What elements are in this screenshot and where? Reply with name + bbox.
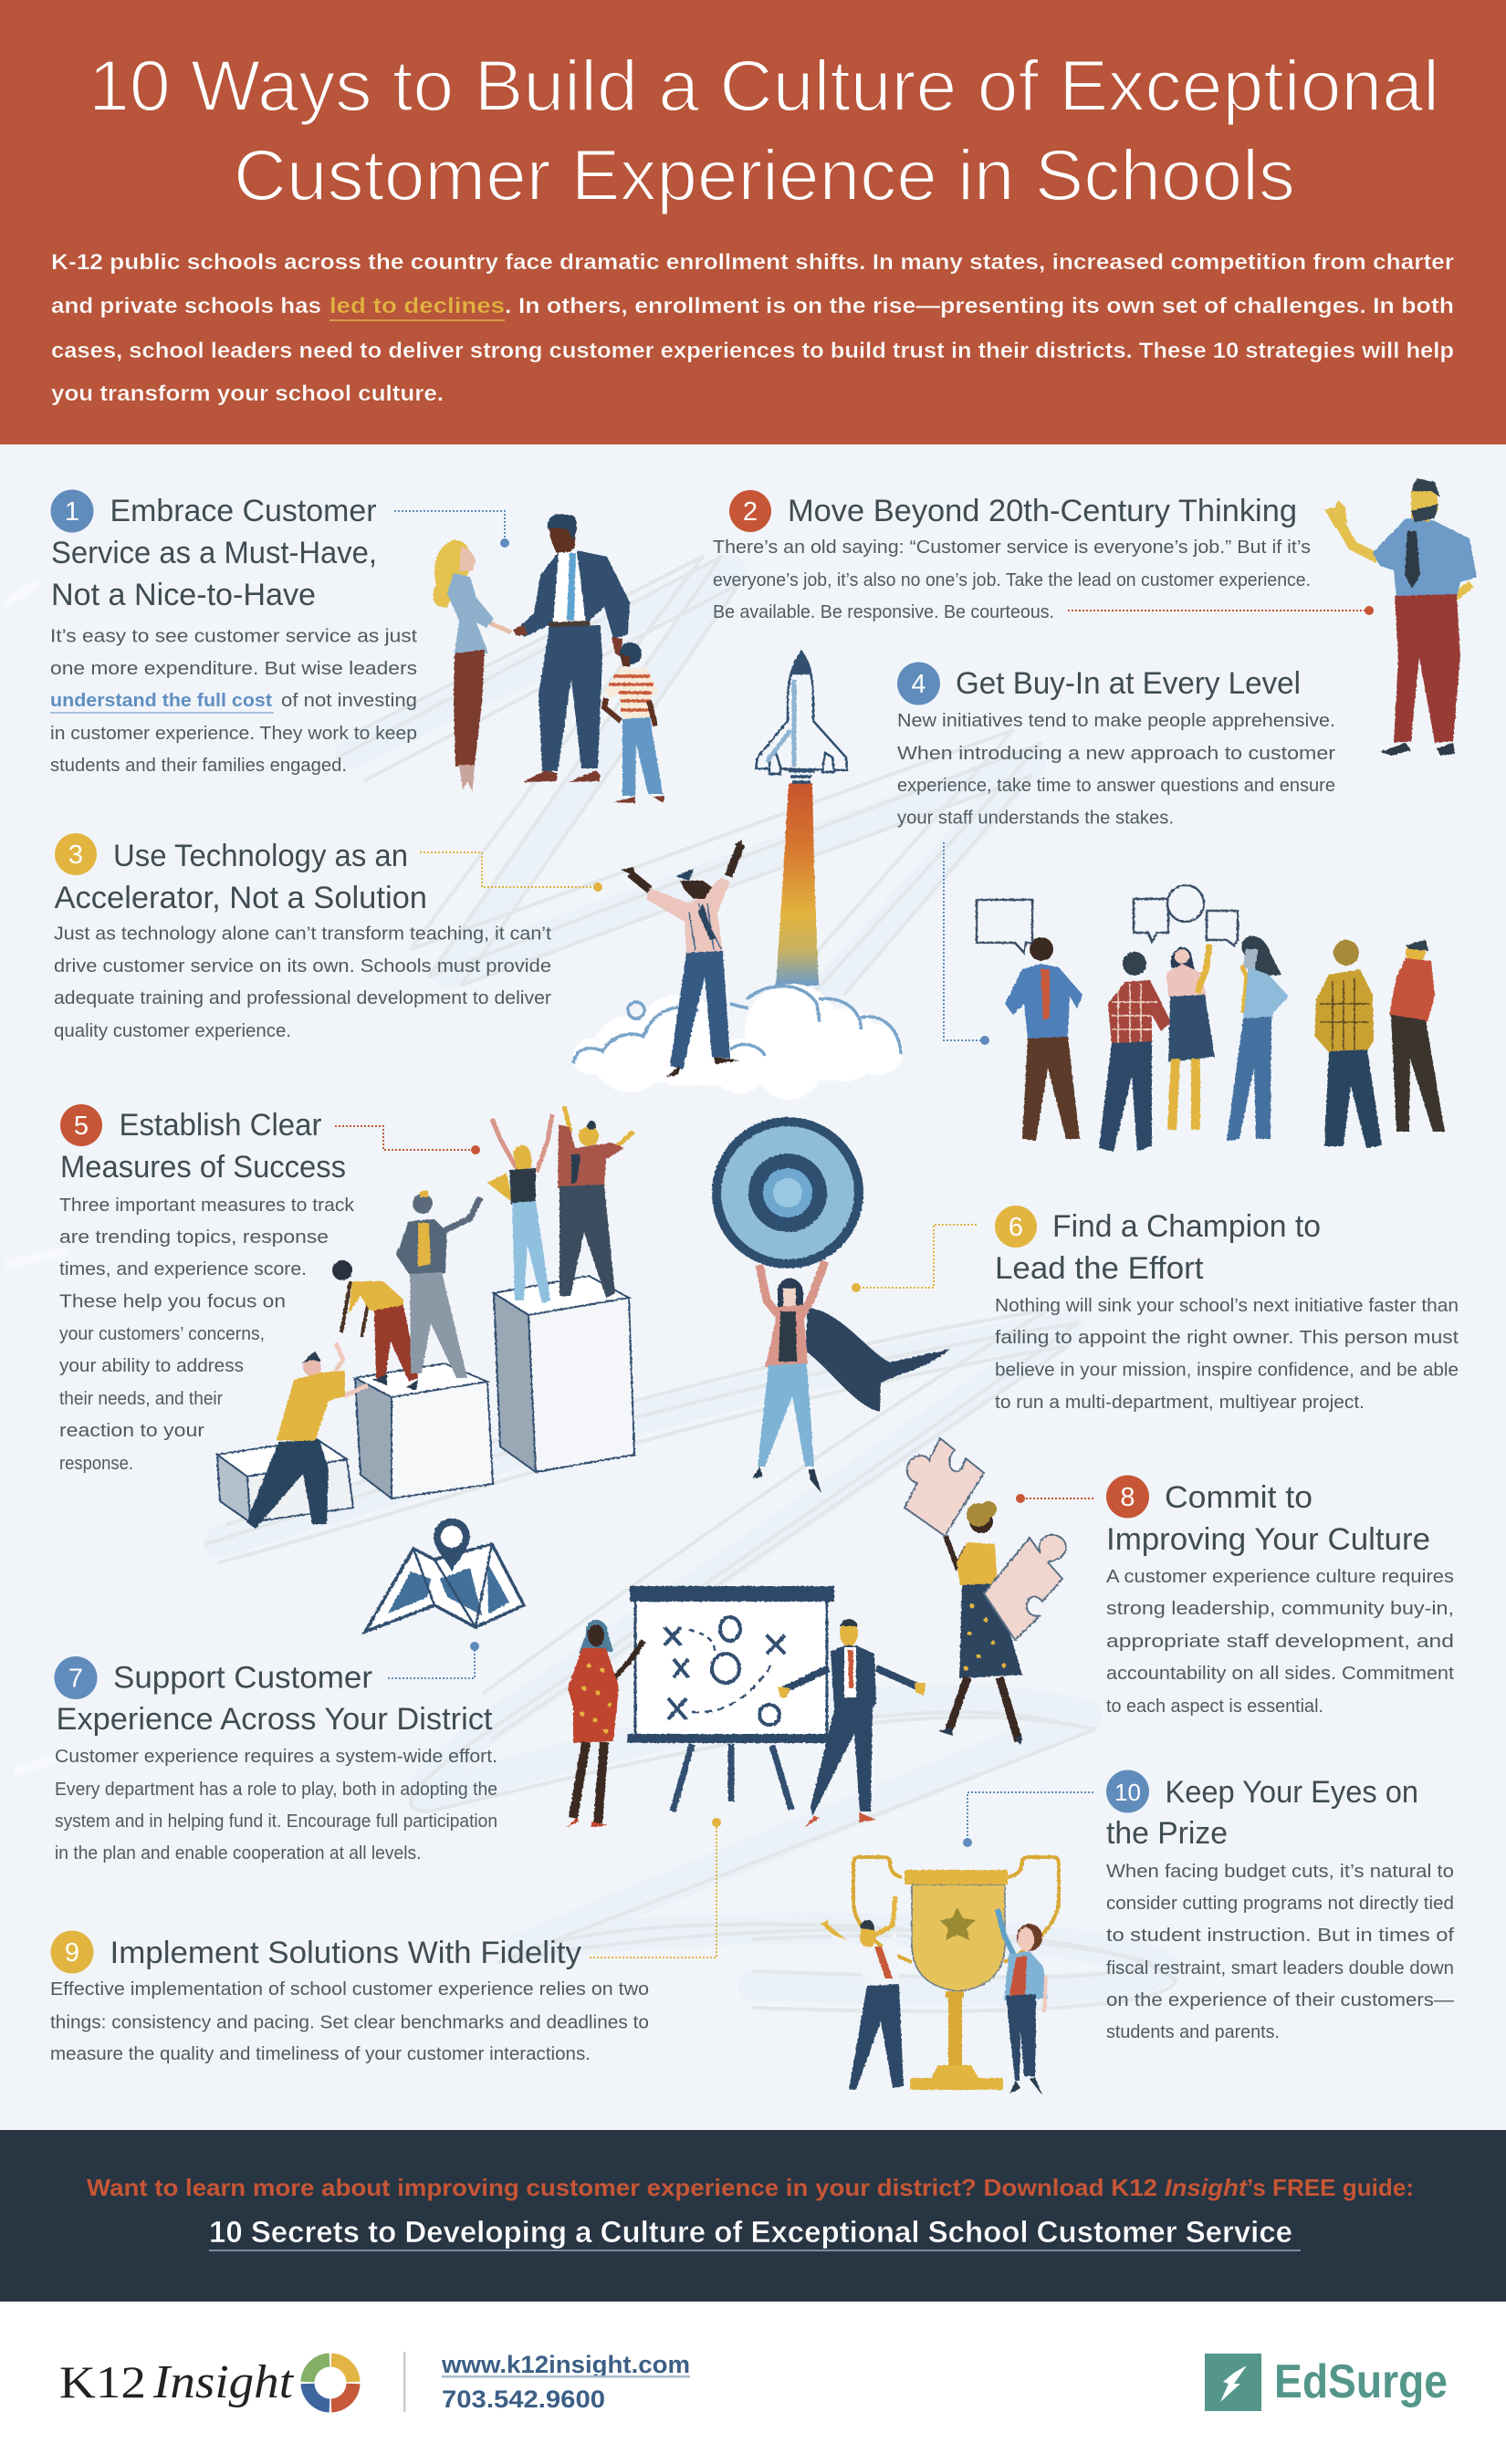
body 5: times, and experience score. — [59, 1259, 307, 1279]
body 8: to each aspect is essential. — [1106, 1697, 1323, 1717]
body 2: everyone’s job, it’s also no one’s job. Take the lead on customer experience. — [713, 570, 1311, 590]
illustration: strategy board — [566, 1586, 926, 1828]
body 1: understand the full cost — [50, 691, 272, 711]
body 10: students and parents. — [1106, 2022, 1280, 2042]
logo: k12 insight: K12 — [59, 2356, 146, 2407]
badge 2: 2 — [743, 497, 758, 527]
man in plaid shirt — [1099, 952, 1171, 1152]
logo: edsurge — [1205, 2354, 1448, 2411]
section 2: move beyond 20th-century thinking — [713, 490, 1374, 622]
intro paragraph: led to declines — [329, 294, 505, 318]
body 5: your ability to address — [59, 1356, 244, 1376]
title: Customer Experience in Schools — [234, 134, 1295, 215]
body 6 — [995, 1296, 1459, 1413]
section 10: keep your eyes on the prize — [963, 1770, 1455, 2042]
heading 4: Get Buy-In at Every Level — [956, 666, 1301, 701]
bending helper — [332, 1260, 418, 1391]
footer — [0, 2302, 1506, 2464]
badge 6 — [995, 1206, 1037, 1248]
illustration: map with pin — [365, 1519, 524, 1632]
body 5: These help you focus on — [59, 1292, 286, 1312]
body 1: It’s easy to see customer service as just — [50, 627, 418, 647]
badge 5 — [60, 1104, 102, 1146]
body 4 — [897, 711, 1335, 829]
woman body — [938, 1501, 1022, 1745]
badge 9 — [51, 1931, 93, 1973]
heading 7: Experience Across Your District — [57, 1702, 493, 1737]
heading 1 — [51, 494, 377, 612]
body 7: Every department has a role to play, both in adopting the — [55, 1780, 497, 1800]
body 10: to student instruction. But in times of — [1106, 1926, 1455, 1946]
body 8: strong leadership, community buy-in, — [1106, 1599, 1454, 1619]
body 3: adequate training and professional development to deliver — [54, 988, 551, 1008]
connector 10 — [963, 1792, 1093, 1847]
body 6: Nothing will sink your school’s next initiative faster than — [995, 1296, 1459, 1316]
body 5 — [59, 1195, 355, 1474]
intro paragraph: cases, school leaders need to deliver strong customer experiences to build trust in their districts. These 10 strategies will help — [51, 339, 1454, 363]
heading 1: Not a Nice-to-Have — [51, 578, 316, 612]
title — [89, 45, 1439, 215]
body 8: accountability on all sides. Commitment — [1106, 1664, 1454, 1684]
board — [635, 1599, 827, 1736]
heading 7 — [57, 1661, 493, 1737]
badge 2 — [729, 490, 771, 532]
body 2 — [713, 538, 1311, 622]
body 3: quality customer experience. — [54, 1021, 291, 1041]
heading 10 — [1106, 1775, 1418, 1851]
woman in skirt — [1166, 945, 1215, 1130]
illustration: man gesturing — [1324, 478, 1477, 756]
body 3: drive customer service on its own. Schools must provide — [54, 956, 551, 976]
play marks — [664, 1617, 785, 1725]
heading 5 — [60, 1108, 346, 1185]
badge 6: 6 — [1009, 1213, 1023, 1242]
badge 5: 5 — [74, 1112, 89, 1141]
standing man — [396, 1190, 480, 1378]
intro paragraph — [51, 250, 1454, 406]
call to action line: Insight — [1165, 2174, 1248, 2201]
illustration: podium climb — [217, 1106, 634, 1529]
section 6: find a champion — [852, 1206, 1459, 1413]
puzzle piece bottom — [984, 1535, 1066, 1640]
heading 8: Improving Your Culture — [1106, 1522, 1430, 1557]
body 2: Be available. Be responsive. Be courteous. — [713, 602, 1054, 622]
body 6: to run a multi-department, multiyear project. — [995, 1393, 1365, 1413]
body 4: your staff understands the stakes. — [897, 809, 1174, 829]
heading 10: the Prize — [1106, 1816, 1228, 1851]
illustration: handshake family — [433, 515, 664, 803]
call to action line: ’s FREE guide: — [1247, 2174, 1414, 2201]
heading 1: Embrace Customer — [110, 494, 376, 528]
body 9: measure the quality and timeliness of your customer interactions. — [50, 2044, 591, 2064]
body 6: believe in your mission, inspire confidence, and be able — [995, 1361, 1459, 1381]
body 10 — [1106, 1862, 1455, 2042]
body 4: experience, take time to answer questions and ensure — [897, 776, 1335, 796]
logo: k12 insight — [59, 2356, 353, 2408]
body 5: their needs, and their — [59, 1389, 223, 1409]
woman in red dress — [566, 1620, 643, 1828]
connector 7 — [388, 1642, 479, 1678]
contact details: www.k12insight.com — [441, 2351, 690, 2378]
body 1: students and their families engaged. — [50, 756, 347, 776]
connector 6 — [852, 1225, 977, 1292]
section 3: use technology — [54, 833, 602, 1041]
heading 3: Accelerator, Not a Solution — [55, 881, 427, 915]
body 1: in customer experience. They work to keep — [50, 724, 417, 744]
body 2: There’s an old saying: “Customer service is everyone’s job.” But if it’s — [713, 538, 1311, 558]
badge 8: 8 — [1120, 1483, 1135, 1512]
man in mustard sweater — [1314, 940, 1382, 1148]
body 9 — [50, 1979, 649, 2064]
badge 8 — [1106, 1475, 1149, 1519]
connector 5 — [335, 1126, 480, 1154]
cup body — [912, 1885, 1005, 1991]
body 7: in the plan and enable cooperation at all levels. — [55, 1843, 422, 1864]
badge 9: 9 — [65, 1938, 79, 1968]
body 8: A customer experience culture requires — [1106, 1567, 1454, 1587]
heading 5: Establish Clear — [119, 1108, 321, 1143]
heading 9: Implement Solutions With Fidelity — [110, 1936, 581, 1970]
intro paragraph: you transform your school culture. — [51, 381, 444, 406]
connector 1 — [394, 511, 509, 548]
call to action band — [0, 2130, 1506, 2302]
heading 1: Service as a Must-Have, — [51, 536, 377, 570]
woman with trophy — [998, 1909, 1048, 2095]
badge 1: 1 — [65, 497, 79, 527]
body 7: system and in helping fund it. Encourage full participation — [55, 1811, 497, 1832]
heading 3: Use Technology as an — [113, 839, 408, 873]
body 8: appropriate staff development, and — [1106, 1632, 1454, 1652]
man cheering — [621, 840, 742, 1077]
body 9: Effective implementation of school customer experience relies on two — [50, 1979, 649, 1999]
heading 6: Find a Champion to — [1052, 1209, 1321, 1244]
badge 1 — [51, 489, 93, 533]
cheering woman — [487, 1114, 552, 1303]
section 9: implement solutions — [50, 1818, 721, 2064]
connector 8 — [1016, 1494, 1093, 1503]
badge 10 — [1106, 1770, 1149, 1812]
section 4: get buy-in — [897, 663, 1335, 1045]
cheering man — [558, 1106, 633, 1298]
body 7: Customer experience requires a system-wide effort. — [55, 1747, 497, 1767]
badge 7 — [55, 1656, 97, 1699]
speech bubbles — [977, 885, 1238, 953]
section 1: embrace customer service — [50, 489, 509, 776]
body 5: Three important measures to track — [59, 1195, 355, 1216]
body 7 — [55, 1747, 497, 1864]
illustration: woman with puzzle pieces — [905, 1438, 1066, 1745]
badge 3 — [55, 833, 97, 875]
woman in light blue — [1227, 936, 1289, 1141]
body 6: failing to appoint the right owner. This person must — [995, 1328, 1459, 1348]
call to action line: Want to learn more about improving customer experience in your district? Download K12 — [87, 2174, 1157, 2201]
woman — [433, 540, 511, 792]
section 5: establish clear measures — [59, 1104, 480, 1474]
body 5: response. — [59, 1454, 133, 1474]
body 8 — [1106, 1567, 1454, 1717]
heading 5: Measures of Success — [60, 1150, 346, 1185]
body 4: New initiatives tend to make people apprehensive. — [897, 711, 1335, 731]
man in blue jacket — [1005, 937, 1082, 1141]
body 5: are trending topics, response — [59, 1227, 329, 1248]
logo: k12 insight: Insight — [152, 2356, 295, 2408]
boy in striped shirt — [604, 642, 664, 803]
hero woman — [753, 1261, 825, 1493]
target — [712, 1117, 863, 1269]
flame — [776, 783, 819, 986]
badge 10: 10 — [1114, 1779, 1141, 1806]
header panel — [0, 0, 1506, 444]
cloud — [572, 984, 904, 1100]
body 3 — [54, 924, 551, 1041]
body 5: your customers’ concerns, — [59, 1324, 265, 1344]
star — [939, 1907, 976, 1940]
illustration: rocket launch — [572, 652, 904, 1100]
contact details — [441, 2351, 690, 2413]
badge 4 — [897, 663, 940, 705]
shuttle — [756, 652, 847, 774]
connector 2 — [1068, 606, 1374, 615]
badge 7: 7 — [68, 1665, 83, 1694]
title: 10 Ways to Build a Culture of Exceptional — [89, 45, 1439, 126]
man in suit — [513, 515, 630, 782]
stem and base — [946, 1991, 964, 1998]
heading 10: Keep Your Eyes on — [1165, 1775, 1418, 1810]
cup handles — [853, 1857, 1059, 1962]
connector 9 — [590, 1818, 721, 1958]
heading 8 — [1106, 1480, 1430, 1557]
intro paragraph: K-12 public schools across the country face dramatic enrollment shifts. In many states, increased competition from charter — [51, 250, 1454, 275]
connector 4 — [944, 842, 989, 1045]
body 1 — [50, 627, 418, 776]
contact details: 703.542.9600 — [442, 2386, 605, 2413]
intro paragraph: and private schools has — [51, 294, 321, 318]
puzzle piece top — [905, 1438, 984, 1536]
body 10: on the experience of their customers— — [1106, 1990, 1454, 2010]
illustration: trophy — [821, 1857, 1059, 2095]
heading 8: Commit to — [1165, 1480, 1313, 1515]
easel legs — [673, 1744, 791, 1811]
body 10: When facing budget cuts, it’s natural to — [1106, 1862, 1454, 1882]
heading 3 — [55, 839, 427, 915]
section 8: commit — [1016, 1475, 1454, 1717]
connector 3 — [420, 852, 602, 892]
illustration: woman lifting target — [712, 1117, 950, 1493]
body 10: consider cutting programs not directly tied — [1106, 1894, 1454, 1914]
intro paragraph: . In others, enrollment is on the rise—presenting its own set of challenges. In both — [505, 294, 1454, 318]
body 5: reaction to your — [59, 1421, 204, 1441]
man in red sweater — [1389, 940, 1445, 1132]
divider — [403, 2352, 405, 2412]
blocks — [217, 1276, 634, 1522]
body 10: fiscal restraint, smart leaders double down — [1106, 1958, 1454, 1979]
heading 7: Support Customer — [113, 1661, 372, 1696]
heading 2: Move Beyond 20th-Century Thinking — [788, 494, 1297, 528]
illustration: team with speech bubbles — [977, 885, 1445, 1152]
climbing man — [246, 1343, 368, 1529]
heading 6: Lead the Effort — [995, 1251, 1204, 1286]
body 3: Just as technology alone can’t transform teaching, it can’t — [54, 924, 551, 944]
man presenting — [778, 1619, 926, 1827]
heading 6 — [995, 1209, 1321, 1286]
guide link: 10 Secrets to Developing a Culture of Exceptional School Customer Service — [209, 2215, 1292, 2249]
badge 3: 3 — [68, 840, 83, 870]
body 4: When introducing a new approach to customer — [897, 744, 1335, 764]
body 1: one more expenditure. But wise leaders — [50, 659, 417, 679]
cape — [805, 1308, 950, 1412]
section 7: support customer experience — [55, 1642, 497, 1864]
body 1: of not investing — [281, 691, 417, 711]
body 9: things: consistency and pacing. Set clear benchmarks and deadlines to — [50, 2013, 649, 2033]
logo: edsurge: EdSurge — [1274, 2355, 1448, 2408]
man with trophy — [821, 1896, 904, 2090]
badge 4: 4 — [911, 670, 926, 699]
